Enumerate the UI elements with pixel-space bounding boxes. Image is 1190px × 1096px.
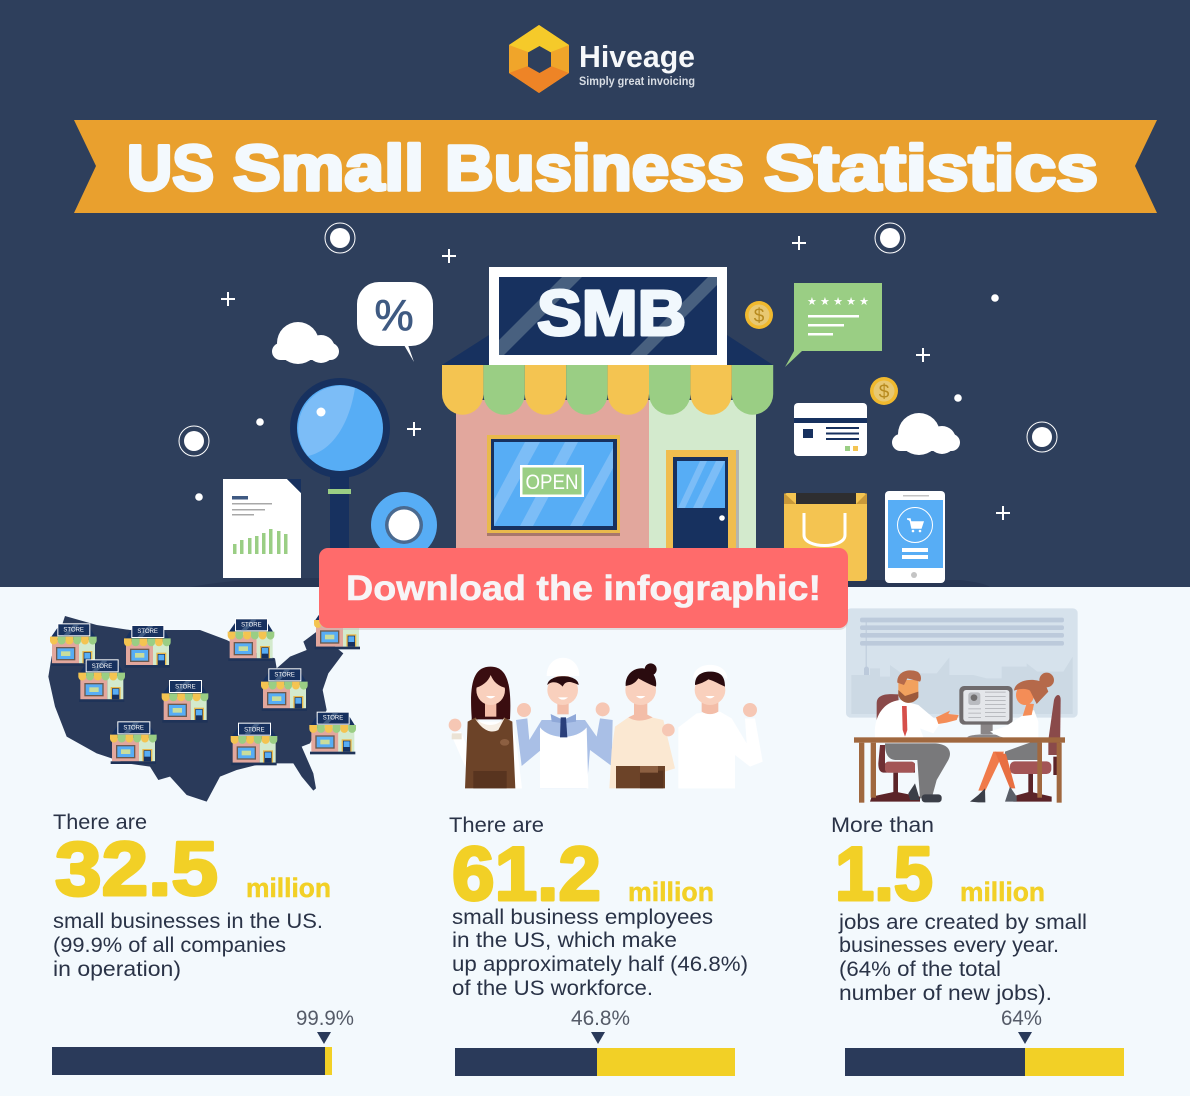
- man on chair: [870, 670, 959, 802]
- logo: Hiveage: Hiveage: [579, 39, 695, 74]
- store 1: STORE: [63, 628, 84, 634]
- store 2: [124, 625, 171, 668]
- ground shadow: [190, 578, 990, 587]
- big number 32.5: 32.5: [55, 827, 218, 912]
- big number 61.2: 61.2: [452, 832, 601, 917]
- office window with blinds: [846, 608, 1078, 718]
- description text: small businesses in the US.: [53, 910, 323, 933]
- storefront window: [487, 435, 620, 536]
- icon: magnifying glass: [290, 378, 390, 555]
- percent bar 64%: [845, 1007, 1124, 1076]
- icon: shopping bag: [784, 493, 867, 581]
- download button: [319, 548, 848, 630]
- storefront door: [666, 450, 739, 587]
- store 3: [228, 618, 274, 661]
- icon: percent bubble: %: [374, 291, 414, 340]
- description text: of the US workforce.: [452, 977, 653, 1000]
- store 1: [50, 623, 97, 666]
- header dark panel: [0, 0, 1190, 587]
- big number 1.5: 1.5: [835, 832, 933, 917]
- store 7: [261, 668, 308, 711]
- title banner: [74, 120, 1157, 213]
- stat column 2: [449, 814, 748, 1076]
- description text: (64% of the total: [839, 958, 1001, 981]
- icon: right cloud: [892, 413, 960, 455]
- percent bar 46.8%: 46.8%: [571, 1007, 630, 1030]
- woman on chair: [970, 673, 1061, 802]
- lead-in text: There are: [53, 811, 147, 834]
- office desk: [854, 737, 1065, 803]
- worker 3: [609, 663, 675, 788]
- worker 2: [516, 658, 613, 788]
- title banner: Statistics: [764, 132, 1098, 204]
- description text: up approximately half (46.8%): [452, 953, 748, 976]
- title banner: Small: [233, 132, 424, 204]
- logo: Hiveage: Simply great invoicing: [579, 76, 695, 88]
- title banner: US: [127, 132, 214, 204]
- store 8: [309, 712, 356, 754]
- description text: small business employees: [452, 906, 713, 929]
- description text: (99.9% of all companies: [53, 934, 286, 957]
- illustration: US map with stores: [48, 607, 361, 802]
- store 5: [78, 659, 125, 702]
- storefront illustration: [442, 267, 773, 587]
- description text: [53, 910, 323, 981]
- store 6: STORE: [175, 685, 196, 691]
- store 4: [314, 607, 361, 649]
- lead-in text: There are: [449, 814, 544, 837]
- store 8: STORE: [323, 716, 343, 722]
- store 3: STORE: [241, 623, 262, 629]
- million label: million: [628, 877, 714, 907]
- icon: percent bubble: [357, 282, 433, 362]
- description text: businesses every year.: [839, 934, 1059, 957]
- million label: million: [246, 873, 331, 903]
- stat column 3: [831, 814, 1124, 1076]
- logo: Hiveage: [509, 25, 695, 93]
- store 4: STORE: [327, 611, 348, 617]
- percent bar 99.9%: [52, 1007, 354, 1075]
- decorative plus signs: [221, 236, 1010, 520]
- icon: phone with cart: [885, 491, 945, 583]
- decorative ringed circles: [179, 223, 1057, 501]
- worker 4: [678, 665, 763, 788]
- icon: coin lower: $: [879, 382, 890, 403]
- description text: jobs are created by small: [838, 911, 1087, 934]
- storefront sign: [489, 267, 727, 365]
- store 10: STORE: [244, 727, 265, 733]
- store 7: STORE: [274, 673, 295, 679]
- icon: coin lower: [870, 377, 898, 405]
- description text: in operation): [53, 958, 181, 981]
- store 10: [231, 723, 277, 765]
- download button: Download the infographic!: [346, 569, 821, 608]
- description text: number of new jobs).: [839, 982, 1052, 1005]
- lead-in text: More than: [831, 814, 934, 837]
- store 9: [110, 721, 157, 764]
- US map silhouette: [48, 616, 343, 802]
- illustration: four workers: [449, 658, 763, 788]
- icon: review bubble: ★★★★★: [807, 295, 869, 308]
- storefront window: OPEN: [526, 471, 578, 494]
- icon: location pin: [371, 492, 437, 558]
- storefront sign: SMB: [537, 277, 686, 349]
- store 2: STORE: [137, 629, 158, 635]
- icon: coin top: [745, 301, 773, 329]
- icon: review bubble: [785, 283, 882, 367]
- store 9: STORE: [123, 726, 144, 732]
- icon: credit card: [794, 403, 867, 456]
- description text: [838, 911, 1087, 1005]
- icon: document with chart: [223, 479, 301, 578]
- title banner: Business: [445, 132, 744, 204]
- computer monitor: [959, 686, 1013, 737]
- store 5: STORE: [92, 664, 112, 670]
- description text: [452, 906, 748, 1000]
- worker 1: [449, 667, 522, 788]
- icon: coin top: $: [754, 306, 765, 327]
- description text: in the US, which make: [452, 929, 677, 952]
- illustration: office meeting: [846, 608, 1078, 803]
- store 6: [162, 680, 208, 723]
- icon: left cloud: [272, 322, 339, 364]
- percent bar 46.8%: [455, 1007, 735, 1076]
- percent bar 64%: 64%: [1001, 1007, 1042, 1030]
- million label: million: [960, 877, 1045, 907]
- percent bar 99.9%: 99.9%: [296, 1007, 354, 1030]
- stat column 1: [52, 811, 354, 1075]
